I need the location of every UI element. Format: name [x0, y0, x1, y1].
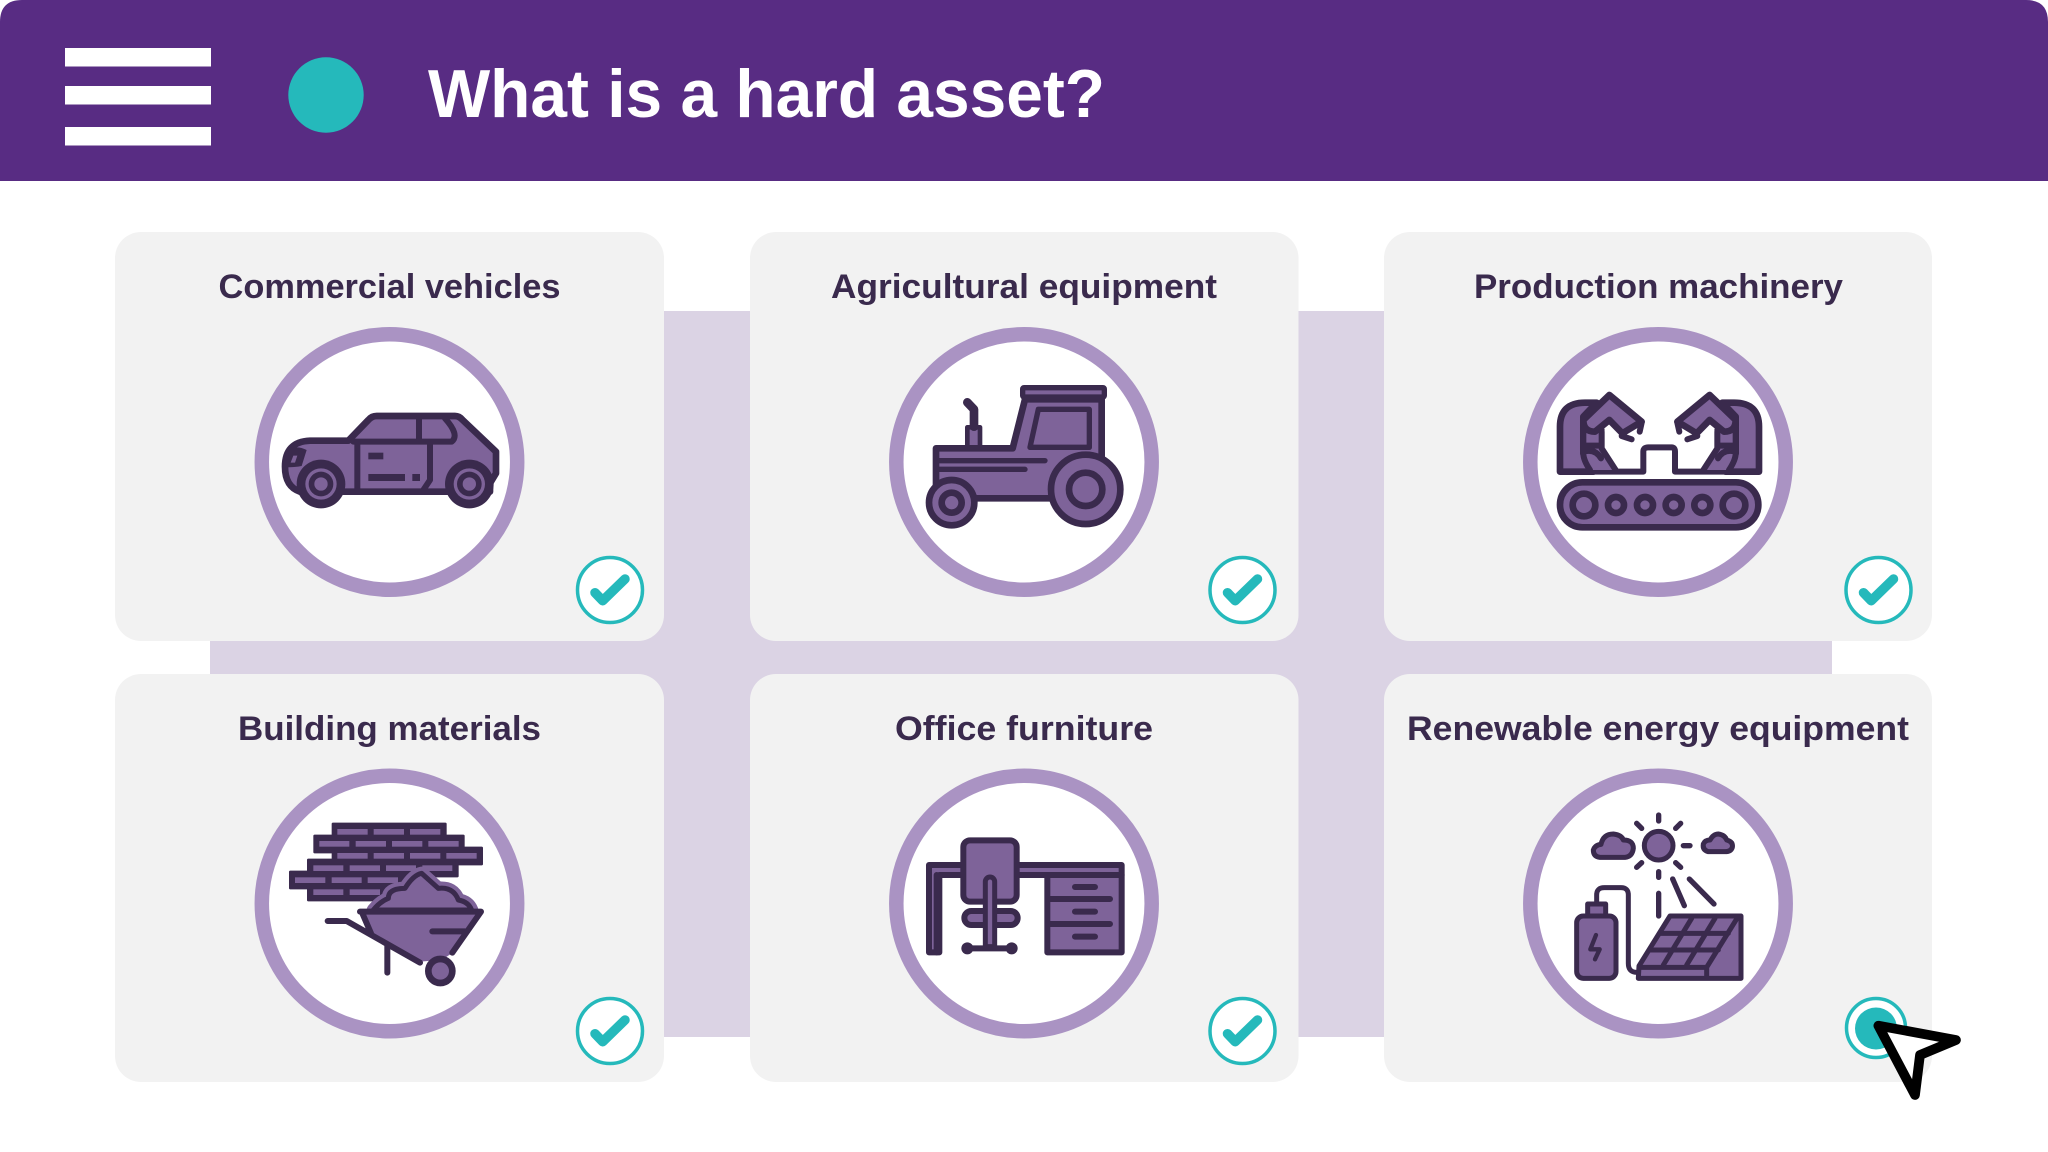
icon: teal status dot: [288, 57, 364, 133]
icon: tractor: [929, 388, 1120, 525]
heading: building materials: Building materials: [238, 710, 541, 748]
icon: hamburger menu: [65, 48, 211, 146]
icon: desk and chair: [929, 840, 1122, 954]
icon: bricks and wheelbarrow: [290, 824, 482, 983]
icon circle: building materials: [262, 776, 517, 1031]
heading: production machinery: Production machinery: [1474, 268, 1843, 306]
icon circle: agricultural equipment: [896, 334, 1152, 590]
icon: sun, battery and solar panel: [1577, 815, 1741, 978]
title: What is a hard asset?: [428, 56, 1105, 132]
heading: commercial vehicles: Commercial vehicles: [218, 268, 560, 306]
icon circle: commercial vehicles: [262, 334, 517, 590]
panel: production machinery: [1384, 232, 1932, 641]
heading: renewable energy equipment: Renewable energy equipment: [1407, 710, 1909, 748]
icon: cursor arrow: [1878, 1026, 1956, 1095]
icon: check mark: [1210, 558, 1275, 622]
icon: check mark: [578, 558, 642, 622]
panel: renewable energy equipment: [1384, 674, 1932, 1082]
heading: office furniture: Office furniture: [895, 710, 1153, 748]
icon: car: [285, 416, 496, 508]
icon circle: renewable energy equipment: [1530, 776, 1786, 1031]
icon: check mark: [578, 998, 642, 1064]
icon circle: office furniture: [896, 776, 1152, 1031]
panel: commercial vehicles: [115, 232, 664, 641]
header bar: [0, 0, 2048, 181]
panel: building materials: [115, 674, 664, 1082]
icon: check mark: [1846, 558, 1911, 622]
lilac background cross: [210, 311, 1832, 1037]
icon circle: production machinery: [1530, 334, 1786, 590]
panel: agricultural equipment: [750, 232, 1298, 641]
heading: agricultural equipment: Agricultural equipment: [831, 268, 1217, 306]
icon: active selection dot: [1846, 998, 1906, 1058]
panel: office furniture: [750, 674, 1298, 1082]
icon: check mark: [1210, 998, 1275, 1064]
icon: robotic arms and conveyor: [1560, 395, 1759, 527]
